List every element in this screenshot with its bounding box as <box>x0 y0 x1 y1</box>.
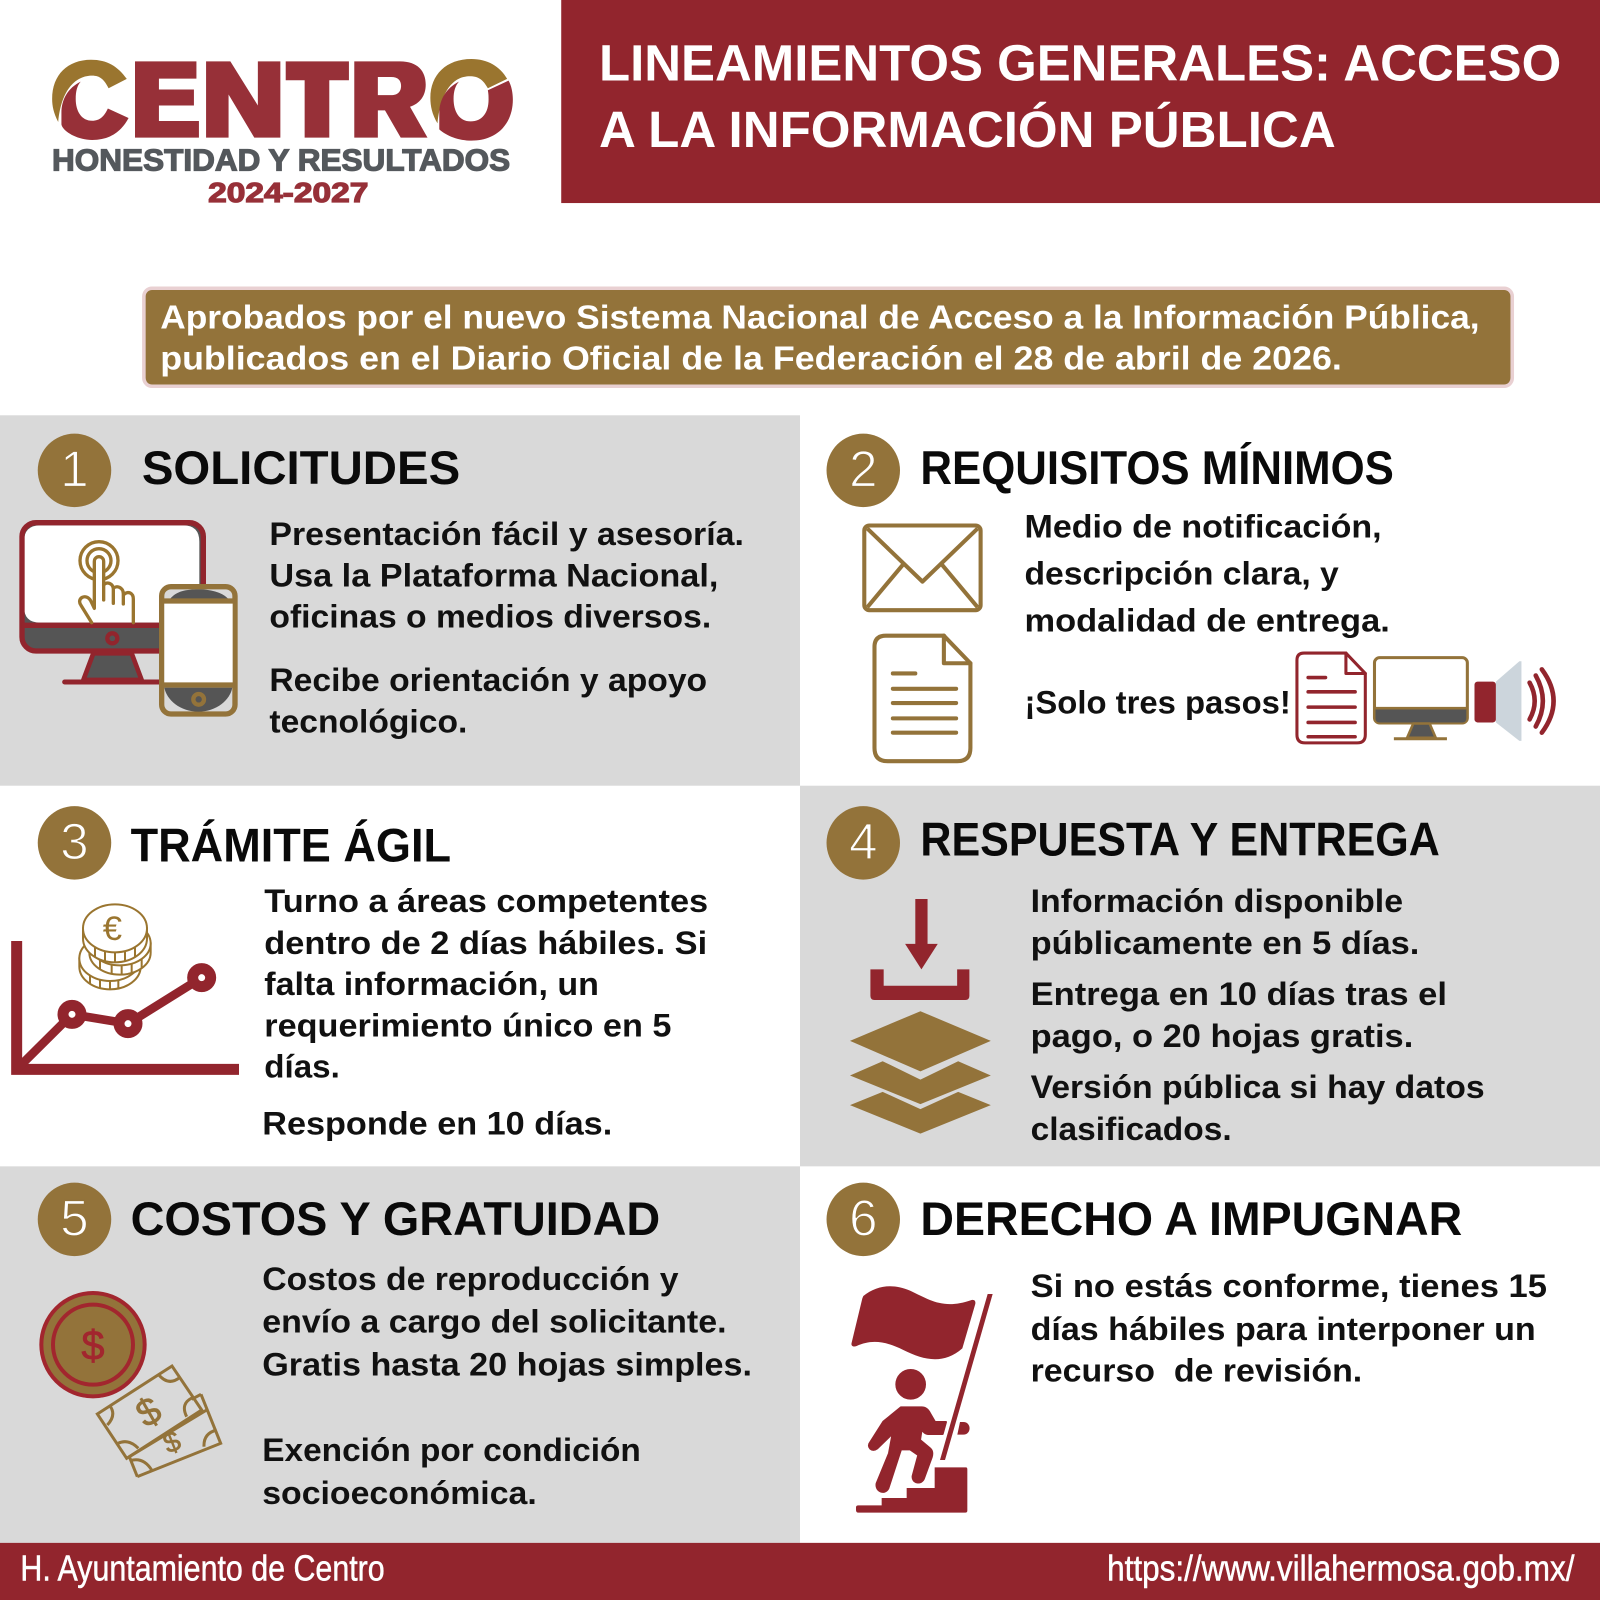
panel 2: requisitos minimos <box>827 434 1554 761</box>
icon: coin and bills <box>41 1293 221 1477</box>
text block 2: ¡Solo tres pasos! <box>1024 683 1291 720</box>
heading solicitudes: SOLICITUDES <box>142 442 460 494</box>
panel 6: derecho a impugnar <box>827 1183 1547 1513</box>
text block 4: públicamente en 5 días. <box>1031 924 1419 961</box>
icon: speaker <box>1474 661 1554 741</box>
text block 4: clasificados. <box>1031 1110 1232 1147</box>
text block 1: tecnológico. <box>269 703 467 740</box>
panel 4: respuesta y entrega <box>800 786 1600 1166</box>
heading derecho: DERECHO A IMPUGNAR <box>920 1193 1462 1245</box>
footer bar <box>0 1543 1600 1600</box>
panel 5: costos y gratuidad <box>0 1166 800 1543</box>
text block 2: descripción clara, y <box>1024 555 1339 592</box>
text block 6: recurso de revisión. <box>1031 1352 1362 1389</box>
text block 3: requerimiento único en 5 <box>264 1007 671 1044</box>
text block 4: pago, o 20 hojas gratis. <box>1031 1017 1413 1054</box>
text block 4: Versión pública si hay datos <box>1031 1068 1485 1105</box>
number badge 1: 1 <box>60 441 89 498</box>
text block 1: oficinas o medios diversos. <box>269 598 711 635</box>
panel 3: tramite agil <box>17 806 708 1142</box>
text block 6 <box>1031 1267 1547 1389</box>
text block 3: Responde en 10 días. <box>262 1105 612 1142</box>
number badge 6 <box>827 1183 900 1256</box>
logo: Centro Honestidad y Resultados <box>52 59 513 208</box>
text block 2: modalidad de entrega. <box>1024 602 1390 639</box>
text block 4: Información disponible <box>1031 882 1403 919</box>
intro callout: Aprobados por el nuevo Sistema Nacional de Acceso a la Información Pública, <box>160 300 1480 337</box>
number badge 5: 5 <box>60 1190 89 1247</box>
number badge 4 <box>827 806 900 880</box>
number badge 1 <box>38 434 111 507</box>
heading costos: COSTOS Y GRATUIDAD <box>131 1193 660 1245</box>
logo years: 2024-2027 <box>208 177 368 208</box>
number badge 4: 4 <box>849 813 877 870</box>
text block 2 <box>1024 508 1390 720</box>
number badge 3 <box>38 806 111 880</box>
text block 3: Turno a áreas competentes <box>264 882 708 919</box>
icon: download tray <box>870 899 969 1000</box>
text block 1 <box>269 515 744 740</box>
number badge 5 <box>38 1183 111 1256</box>
text block 1: Usa la Plataforma Nacional, <box>269 557 718 594</box>
intro callout: publicados en el Diario Oficial de la Federación el 28 de abril de 2026. <box>160 340 1342 377</box>
icon: document <box>874 636 970 761</box>
title text <box>599 35 1561 158</box>
heading respuesta: RESPUESTA Y ENTREGA <box>920 814 1440 866</box>
icon: monitor and phone with touch <box>22 523 235 714</box>
text block 6: días hábiles para interponer un <box>1031 1310 1536 1347</box>
icon: coin and bills: $ <box>159 1425 186 1460</box>
text block 5: socioeconómica. <box>262 1474 537 1511</box>
logo tagline: HONESTIDAD Y RESULTADOS <box>52 143 510 177</box>
heading tramite: TRÁMITE ÁGIL <box>131 820 451 872</box>
text block 3: días. <box>264 1048 340 1085</box>
panel 1: solicitudes <box>0 415 800 786</box>
number badge 3: 3 <box>60 813 89 870</box>
title text: LINEAMIENTOS GENERALES: ACCESO <box>599 35 1561 92</box>
text block 2: Medio de notificación, <box>1024 508 1382 545</box>
icon: small monitor <box>1374 658 1467 739</box>
number badge 2: 2 <box>849 441 877 498</box>
text block 1: Recibe orientación y apoyo <box>269 661 707 698</box>
intro callout <box>144 288 1512 386</box>
text block 5: envío a cargo del solicitante. <box>262 1303 727 1340</box>
title text: A LA INFORMACIÓN PÚBLICA <box>599 101 1336 158</box>
icon: envelope <box>864 526 981 610</box>
footer left label: H. Ayuntamiento de Centro <box>20 1549 385 1589</box>
logo wordmark letters <box>52 59 513 141</box>
icon: growth chart with coins <box>17 904 239 1069</box>
text block 5 <box>262 1260 752 1511</box>
icon: small red document <box>1297 653 1365 743</box>
icon: coin and bills: $ <box>81 1321 105 1368</box>
icon: person climbing stairs with flag <box>851 1286 993 1513</box>
number badge 2 <box>827 434 900 507</box>
text block 5: Exención por condición <box>262 1431 641 1468</box>
title banner <box>561 0 1600 203</box>
number badge 6: 6 <box>849 1190 877 1247</box>
text block 3: dentro de 2 días hábiles. Si <box>264 924 707 961</box>
text block 1: Presentación fácil y asesoría. <box>269 515 744 552</box>
text block 4 <box>1031 882 1485 1147</box>
text block 5: Gratis hasta 20 hojas simples. <box>262 1346 752 1383</box>
icon: stacked layers <box>850 1011 991 1134</box>
text block 3 <box>262 882 708 1142</box>
icon: growth chart with coins: € <box>103 910 122 948</box>
text block 6: Si no estás conforme, tienes 15 <box>1031 1267 1547 1304</box>
heading requisitos: REQUISITOS MÍNIMOS <box>920 442 1394 494</box>
text block 3: falta información, un <box>264 965 599 1002</box>
icon: coin and bills: $ <box>129 1388 169 1436</box>
text block 4: Entrega en 10 días tras el <box>1031 975 1447 1012</box>
text block 5: Costos de reproducción y <box>262 1260 679 1297</box>
